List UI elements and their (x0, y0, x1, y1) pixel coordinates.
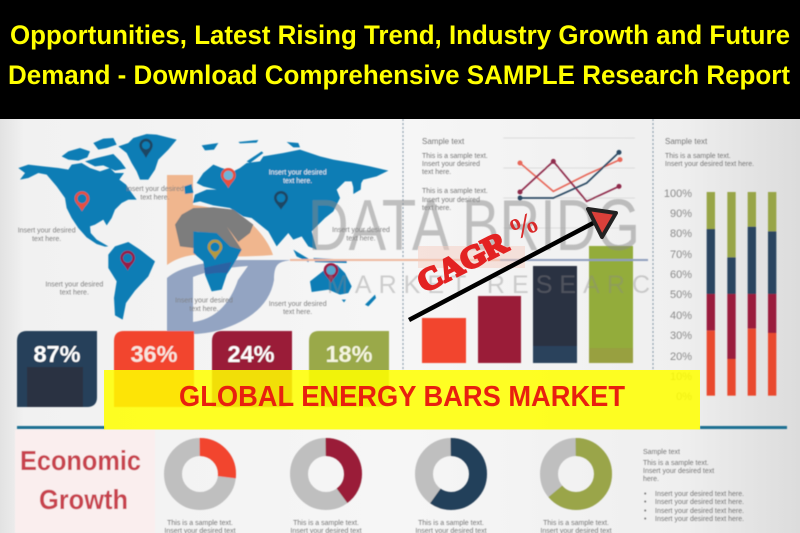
map labels: text here. (32, 236, 61, 243)
bottom right text block: • (644, 491, 647, 498)
map labels: Insert your desired (18, 228, 76, 235)
watermark text: MARKET RESEARC (327, 271, 650, 299)
series: salmon (518, 158, 622, 191)
stacked chart axis labels: 60% (670, 269, 692, 281)
stat card: 24%: 24% (227, 341, 275, 367)
bottom right text block: This is a sample text. (643, 460, 709, 467)
stat card: 18% (309, 331, 389, 407)
map labels: Insert your desired (45, 281, 103, 288)
stacked bar chart (707, 192, 776, 396)
line chart panel text: text here. (422, 205, 451, 212)
panel: economic growth: Economic (20, 445, 141, 476)
map labels: Insert your desired (332, 227, 390, 234)
bar chart (422, 246, 633, 363)
stacked chart heading: This is a sample text. (665, 153, 731, 160)
stacked chart axis labels: 10% (670, 371, 692, 383)
map pins (75, 139, 338, 283)
stacked chart axis labels: 90% (670, 208, 692, 220)
bottom right text block (643, 449, 744, 523)
title: Demand - Download Comprehensive SAMPLE Research Report (8, 60, 790, 90)
line chart panel text: Insert your desired (422, 197, 480, 204)
donut captions: This is a sample text. (543, 520, 609, 527)
line chart panel text: Sample text (422, 137, 465, 146)
series: navy (518, 151, 621, 200)
watermark text: DATA BRIDG (308, 186, 640, 266)
bottom right text block: • (644, 499, 647, 506)
line chart panel text: Insert your desired (422, 161, 480, 168)
infographic content (15, 119, 787, 533)
series: crimson (518, 160, 621, 201)
banner: global energy bars market: GLOBAL ENERGY BARS MARKET (179, 381, 625, 413)
map: north Africa and Arabia (175, 207, 253, 250)
watermark logo: blue D (167, 260, 291, 334)
bottom right text block: • (644, 516, 647, 523)
bottom right text block: Insert your desired text here. (655, 499, 744, 506)
stacked chart axis labels (664, 188, 692, 403)
stacked chart heading: Insert your desired text here. (665, 161, 754, 168)
map labels: Insert your desired (269, 301, 327, 308)
section rule (17, 426, 787, 429)
stat card: 36% (114, 331, 194, 407)
CAGR pale backing (418, 246, 525, 268)
donut: navy (424, 447, 478, 501)
panel: economic growth: Growth (39, 484, 128, 515)
donut: olive (549, 447, 603, 501)
map labels: text here. (283, 178, 312, 185)
title: Opportunities, Latest Rising Trend, Industry Growth and Future (10, 20, 790, 50)
stacked chart heading: Sample text (665, 137, 708, 146)
map labels: text here. (60, 290, 89, 297)
bottom right text block: Insert your desired text (643, 468, 714, 475)
stacked chart axis labels: 100% (664, 188, 692, 200)
map labels: text here. (346, 235, 376, 242)
map: central and south Africa (193, 231, 242, 291)
CAGR arrow (409, 209, 616, 320)
stacked chart axis labels: 70% (670, 249, 692, 261)
background (0, 118, 800, 533)
stat card: 87% (17, 331, 97, 407)
title (8, 20, 790, 90)
dotted dividers (403, 119, 653, 370)
map: northern landmasses (18, 134, 388, 320)
stacked chart axis labels: 30% (670, 330, 692, 342)
stacked chart heading (665, 137, 754, 168)
donut captions: This is a sample text. (293, 520, 359, 527)
map labels: text here. (189, 306, 219, 313)
map labels: text here. (283, 309, 312, 316)
stat card: 18%: 18% (325, 341, 373, 367)
map labels: text here. (140, 194, 170, 201)
map labels: Insert your desired (175, 298, 233, 305)
donut charts (173, 447, 603, 501)
bottom right text block: here. (643, 476, 659, 483)
watermark rule lines (290, 259, 648, 261)
header band (0, 0, 800, 119)
stacked chart axis labels: 20% (670, 351, 692, 363)
stat card: 24% (212, 331, 292, 407)
line chart panel text: text here. (422, 169, 451, 176)
map: Africa overlap band (204, 262, 232, 275)
line chart (503, 138, 635, 228)
stacked chart axis labels: 50% (670, 289, 692, 301)
percent sign: % (503, 205, 544, 247)
stacked chart axis labels: 80% (670, 228, 692, 240)
donut captions: This is a sample text. (418, 520, 484, 527)
bottom right text block: Sample text (643, 449, 680, 456)
stacked chart axis labels: 40% (670, 310, 692, 322)
world map (18, 134, 390, 320)
CAGR label: CAGR (411, 224, 513, 299)
bottom right text block: • (644, 508, 647, 515)
bottom right text block: Insert your desired text here. (655, 508, 744, 515)
map labels: Insert your desired (126, 186, 184, 193)
banner: global energy bars market (104, 370, 700, 430)
stat card: 36%: 36% (130, 341, 178, 367)
donut captions: This is a sample text. (167, 520, 233, 527)
donut: crimson (299, 447, 353, 501)
bottom right text block: Insert your desired text here. (655, 491, 744, 498)
bottom right text block: Insert your desired text here. (655, 516, 744, 523)
line chart panel text (422, 137, 488, 212)
panel: economic growth (15, 430, 155, 533)
map labels: Insert your desired (269, 170, 327, 177)
line chart panel text: This is a sample text. (422, 153, 488, 160)
watermark text (308, 186, 650, 299)
map labels (18, 170, 390, 316)
stacked chart axis labels: 0% (676, 391, 692, 403)
line chart panel text: This is a sample text. (422, 188, 488, 195)
watermark logo: orange shape (167, 175, 273, 265)
donut: red (173, 447, 227, 501)
stat card: 87%: 87% (33, 341, 81, 367)
donut captions (164, 520, 612, 533)
